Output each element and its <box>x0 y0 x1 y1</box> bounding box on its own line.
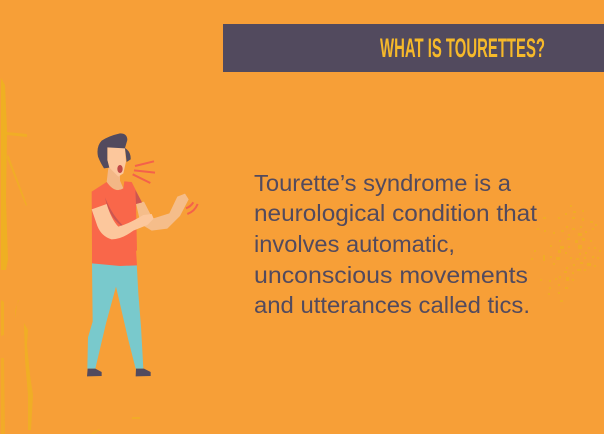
shout lines <box>133 161 198 214</box>
far arm <box>136 194 189 231</box>
near arm <box>92 204 154 239</box>
shoes <box>87 369 151 376</box>
shirt <box>92 181 142 251</box>
neck <box>107 165 123 190</box>
body text: involves automatic, <box>254 231 455 257</box>
body text <box>254 170 537 318</box>
shirt hem <box>92 249 137 266</box>
legs <box>87 249 151 376</box>
body text: and utterances called tics. <box>254 292 530 318</box>
body text: neurological condition that <box>254 200 537 226</box>
body text: unconscious movements <box>254 262 528 288</box>
shirt shadow <box>105 197 137 229</box>
hair <box>97 133 131 168</box>
header banner <box>223 24 604 72</box>
face <box>107 146 126 177</box>
body text: Tourette’s syndrome is a <box>254 170 512 196</box>
mouth <box>117 165 123 173</box>
illustration: person with tics <box>87 133 198 376</box>
